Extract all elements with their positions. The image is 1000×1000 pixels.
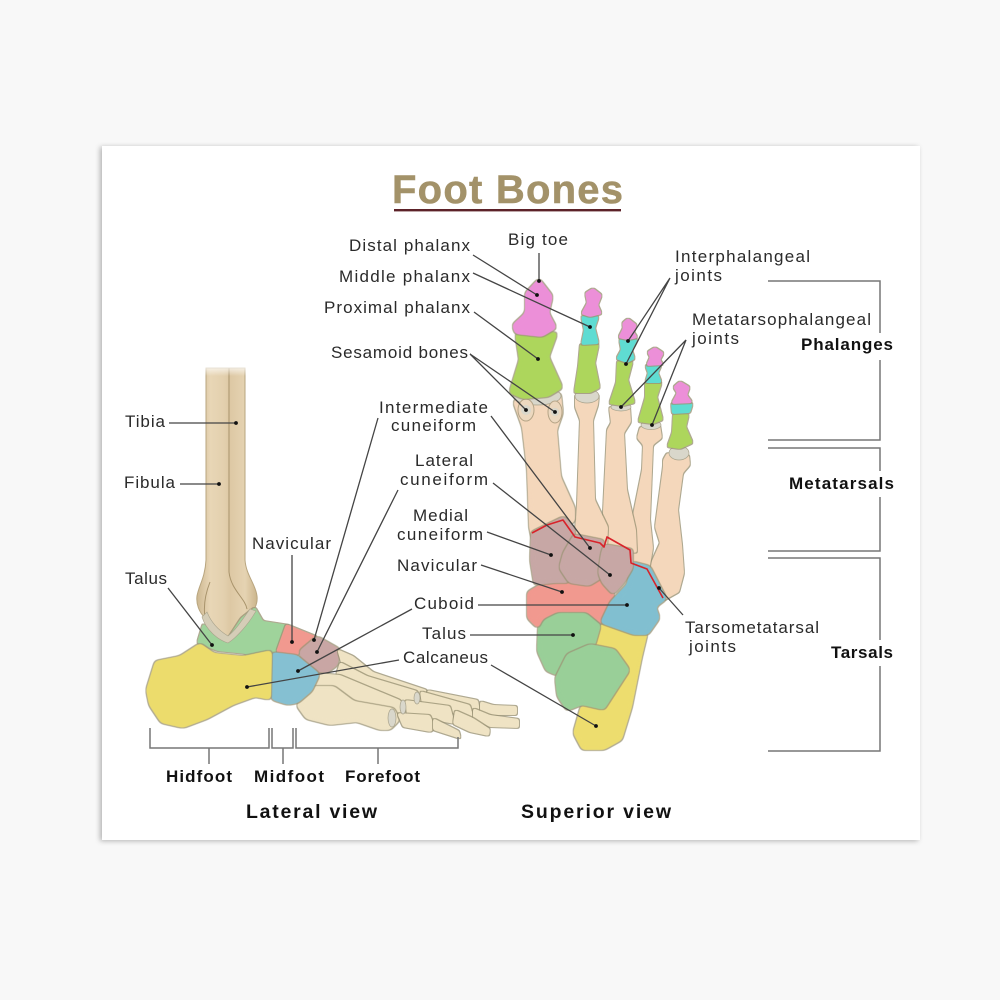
label: Tarsometatarsal joints: joints — [688, 637, 736, 656]
tarsometatarsal joint line — [532, 520, 663, 598]
label: Tarsometatarsal joints: Tarsometatarsal — [685, 618, 819, 637]
label: Talus, superior — [422, 624, 575, 643]
label: Calcaneus: Calcaneus — [403, 648, 488, 667]
bracket: Midfoot — [254, 728, 324, 786]
label: Tarsometatarsal joints — [657, 586, 819, 656]
label: Interphalangeal joints — [624, 247, 810, 366]
label: Tibia — [125, 412, 238, 431]
cuneiforms, lateral — [299, 636, 340, 676]
label: Medial cuneiform: Medial — [413, 506, 468, 525]
label: Big toe — [508, 230, 568, 283]
ankle cartilage — [202, 609, 256, 643]
talus, superior — [537, 607, 630, 711]
poster card background — [102, 146, 920, 840]
navicular, superior — [527, 575, 615, 629]
label: Talus, lateral — [125, 569, 214, 647]
label: Distal phalanx: Distal phalanx — [349, 236, 470, 255]
label: Fibula: Fibula — [124, 473, 176, 492]
bracket: Tarsals: Tarsals — [831, 643, 893, 662]
bracket: Metatarsals: Metatarsals — [789, 474, 894, 493]
navicular, lateral — [276, 624, 318, 658]
label: Sesamoid bones: Sesamoid bones — [331, 343, 468, 362]
bracket: Phalanges — [768, 281, 893, 440]
label: Cuboid — [296, 594, 629, 673]
middle phalanges — [581, 316, 693, 414]
label: Proximal phalanx — [324, 298, 540, 361]
label: Intermediate cuneiform: Intermediate — [379, 398, 488, 417]
bracket: Midfoot: Midfoot — [254, 767, 324, 786]
talus, lateral — [197, 607, 289, 661]
joint cartilage, superior — [513, 342, 689, 460]
label: Interphalangeal joints: Interphalangeal — [675, 247, 810, 266]
bracket: Hidfoot: Hidfoot — [166, 767, 232, 786]
label: Navicular, superior — [397, 556, 564, 594]
distal phalanges — [512, 278, 693, 404]
label: Middle phalanx: Middle phalanx — [339, 267, 470, 286]
proximal phalanges — [509, 332, 693, 449]
label: Talus, lateral: Talus — [125, 569, 167, 588]
label: Tibia: Tibia — [125, 412, 166, 431]
label: Intermediate cuneiform: cuneiform — [391, 416, 476, 435]
label: Medial cuneiform — [397, 506, 553, 557]
tibia and fibula — [197, 364, 257, 642]
label: Navicular, superior: Navicular — [397, 556, 477, 575]
label: Sesamoid bones — [331, 343, 557, 414]
cuneiforms, superior — [530, 516, 633, 595]
bracket: Forefoot — [296, 728, 458, 786]
bracket: Hidfoot — [150, 728, 269, 786]
label: Big toe: Big toe — [508, 230, 568, 249]
sesamoid bones — [518, 399, 562, 423]
metatarsal bones, superior — [513, 393, 690, 601]
label: Lateral cuneiform: cuneiform — [400, 470, 488, 489]
label: Navicular, lateral: Navicular — [252, 534, 331, 553]
label: Metatarsophalangeal joints — [619, 310, 871, 427]
label: Proximal phalanx: Proximal phalanx — [324, 298, 470, 317]
label: Navicular, lateral — [252, 534, 331, 644]
title: Foot Bones — [392, 168, 623, 212]
bracket: Phalanges: Phalanges — [801, 335, 893, 354]
label: Interphalangeal joints: joints — [674, 266, 722, 285]
superior view foot illustration — [509, 278, 693, 750]
label: Middle phalanx — [339, 267, 592, 329]
label: Talus, superior: Talus — [422, 624, 466, 643]
bracket: Forefoot: Forefoot — [345, 767, 420, 786]
label: Fibula — [124, 473, 221, 492]
label: Medial cuneiform: cuneiform — [397, 525, 483, 544]
label: Metatarsophalangeal joints: Metatarsophalangeal — [692, 310, 871, 329]
bracket: Tarsals — [768, 558, 893, 751]
metatarsal and toe bones, lateral — [296, 649, 519, 739]
cuboid, superior — [600, 561, 667, 635]
label: Calcaneus — [245, 648, 598, 728]
caption: Superior view: Superior view — [521, 801, 672, 823]
label: Metatarsophalangeal joints: joints — [691, 329, 739, 348]
cuboid, lateral — [267, 652, 320, 705]
caption: Lateral view: Lateral view — [246, 801, 378, 823]
calcaneus, superior — [573, 620, 648, 750]
lateral view foot illustration — [146, 364, 519, 739]
label: Lateral cuneiform — [315, 451, 612, 654]
calcaneus, lateral — [146, 643, 272, 728]
bracket: Metatarsals — [768, 448, 894, 551]
label: Cuboid: Cuboid — [414, 594, 474, 613]
label: Intermediate cuneiform — [312, 398, 592, 642]
label: Distal phalanx — [349, 236, 539, 297]
label: Lateral cuneiform: Lateral — [415, 451, 473, 470]
